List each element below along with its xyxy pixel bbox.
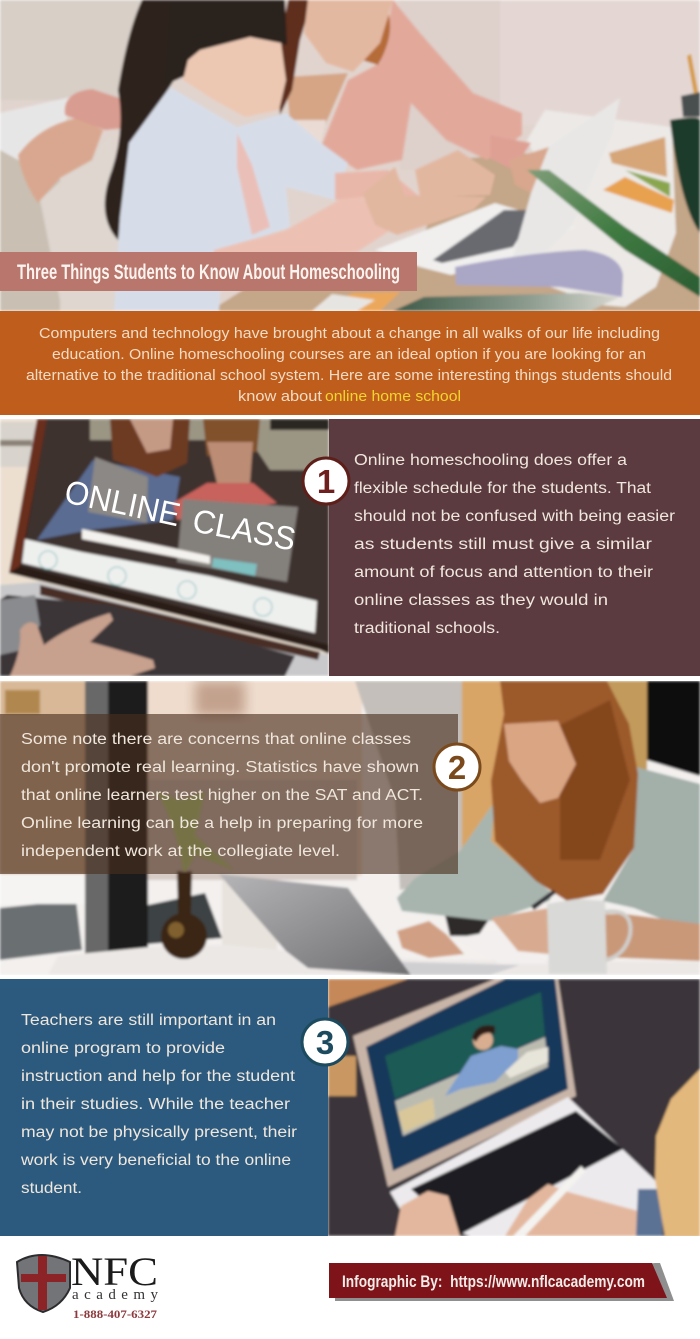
plant leaves xyxy=(527,170,700,297)
text block 3: Teachers are still important in an xyxy=(21,1012,276,1029)
curtain xyxy=(355,681,468,890)
laptop lid xyxy=(516,100,620,238)
arm xyxy=(549,914,700,961)
text block 2: independent work at the collegiate level. xyxy=(21,843,340,860)
text block 1: flexible schedule for the students. That xyxy=(354,480,652,497)
pencil cup xyxy=(681,92,700,117)
keyboard deck xyxy=(0,582,329,676)
wood wall xyxy=(462,681,522,871)
text block 2: don't promote real learning. Statistics have shown xyxy=(21,759,419,776)
text block 1: online classes as they would in xyxy=(354,592,608,609)
hero photo: girl and mother at laptop xyxy=(0,0,700,311)
blurred street background xyxy=(147,681,362,876)
laptop screen xyxy=(366,979,568,1171)
number badge 2 xyxy=(434,744,480,790)
logo: 1-888-407-6327 xyxy=(73,1309,157,1321)
credit banner xyxy=(329,1263,674,1301)
text block 1: traditional schools. xyxy=(354,620,500,637)
plant in vase xyxy=(157,792,234,872)
hinge xyxy=(40,585,320,660)
text block 3: may not be physically present, their xyxy=(21,1124,297,1141)
laptop lid xyxy=(353,979,576,1187)
pen xyxy=(531,890,556,910)
panel 3 xyxy=(0,979,328,1236)
intro text: online home school xyxy=(325,389,461,405)
woman face xyxy=(304,0,393,72)
girl sleeve xyxy=(213,196,388,252)
laptop screen caption: ONLINE xyxy=(62,473,184,533)
face xyxy=(504,721,576,803)
stickies xyxy=(347,291,400,311)
sweater right xyxy=(603,764,700,924)
woman neck xyxy=(286,73,348,123)
text block 2: that online learners test higher on the SAT and ACT. xyxy=(21,787,423,804)
button xyxy=(212,558,257,576)
right white desk xyxy=(527,110,676,307)
sleeve xyxy=(636,1189,663,1236)
notebook xyxy=(455,931,549,964)
grey window frame xyxy=(85,681,109,966)
number badge 2: 2 xyxy=(448,749,466,786)
sweater left xyxy=(397,801,553,921)
screen picture xyxy=(21,419,329,645)
intro text: know about xyxy=(238,389,322,405)
hands xyxy=(395,1191,460,1236)
logo: NFC xyxy=(71,1249,158,1294)
left car xyxy=(0,900,82,960)
ponytail xyxy=(103,0,174,240)
text block 3: online program to provide xyxy=(21,1040,225,1057)
logo: academy xyxy=(72,1287,158,1303)
text block 1: should not be confused with being easier xyxy=(354,508,675,525)
classroom desk xyxy=(395,1037,548,1136)
teacher xyxy=(445,1046,518,1096)
intro text: education. Online homeschooling courses are an ideal option if you are looking for an xyxy=(52,347,646,363)
glass xyxy=(222,880,277,965)
search box xyxy=(82,529,210,564)
logo xyxy=(17,1249,158,1321)
icon: shield xyxy=(17,1255,70,1312)
right hand xyxy=(491,908,549,954)
woman's far arm and hand xyxy=(18,118,103,203)
number badge 1: 1 xyxy=(317,463,335,500)
laptop screen caption: CLASS xyxy=(190,502,299,558)
table wood xyxy=(210,140,700,311)
text block 1 xyxy=(354,452,675,637)
keyboard keys xyxy=(0,595,295,676)
shadow under sweater xyxy=(445,915,492,936)
table xyxy=(48,945,700,975)
laptop screen caption xyxy=(62,473,299,558)
keyboard xyxy=(411,1111,623,1234)
intro text: alternative to the traditional school system. Here are some interesting things students should xyxy=(26,368,672,384)
title bar xyxy=(0,252,417,291)
tablets xyxy=(88,457,148,523)
panel 1 xyxy=(329,419,700,676)
text block 2 xyxy=(21,731,423,860)
woman blouse xyxy=(321,0,522,170)
text block 3: work is very beneficial to the online xyxy=(20,1152,291,1169)
pink undershirt xyxy=(237,133,270,235)
woman on screen xyxy=(37,460,180,540)
intro text: Computers and technology have brought about a change in all walks of our life including xyxy=(39,326,660,342)
text block 3: student. xyxy=(21,1180,82,1197)
girl hair top xyxy=(165,0,287,85)
left desk xyxy=(0,97,70,161)
vase xyxy=(161,871,207,959)
laptop base xyxy=(390,1097,660,1236)
number badge 3: 3 xyxy=(316,1024,334,1061)
hand xyxy=(10,613,155,676)
text block 2: Online learning can be a help in preparing for more xyxy=(21,815,423,832)
intro band xyxy=(0,311,700,415)
screen bezel xyxy=(9,419,329,654)
photo: woman writing at laptop xyxy=(0,681,700,975)
left hand xyxy=(397,921,464,958)
girl shirt xyxy=(114,87,348,311)
chalkboard xyxy=(385,992,545,1099)
laptop base xyxy=(376,202,518,276)
panel 2: translucent xyxy=(0,714,458,874)
menu strip xyxy=(22,539,317,633)
right car xyxy=(148,893,222,944)
text block 1: Online homeschooling does offer a xyxy=(354,452,627,469)
laptop lid xyxy=(219,874,411,975)
woman hair xyxy=(279,0,312,115)
boy on screen xyxy=(173,483,277,520)
dark pillar xyxy=(108,681,148,966)
heading: Three Things Students to Know About Homeschooling xyxy=(17,261,400,284)
chair xyxy=(40,182,60,296)
hair xyxy=(655,1069,700,1237)
intro text xyxy=(26,326,672,405)
text block 3 xyxy=(20,1012,297,1197)
laptop keyboard xyxy=(433,210,527,263)
text block 3: in their studies. While the teacher xyxy=(21,1096,290,1113)
text block 1: as students still must give a similar xyxy=(354,536,652,553)
number badge 1 xyxy=(303,458,349,504)
text block 3: instruction and help for the student xyxy=(21,1068,296,1085)
pencil pouch xyxy=(455,250,623,297)
photo: laptop showing online class xyxy=(0,419,329,676)
girl hands xyxy=(415,150,495,197)
number badge 3 xyxy=(302,1019,348,1065)
photo: laptop with teacher on screen xyxy=(328,979,700,1237)
woman cuff and hand xyxy=(491,138,532,168)
girl face xyxy=(183,37,286,117)
books xyxy=(609,137,667,177)
mug xyxy=(547,899,607,974)
text block 2: Some note there are concerns that online classes xyxy=(21,731,411,748)
pen xyxy=(513,1166,586,1236)
text block 1: amount of focus and attention to their xyxy=(354,564,653,581)
hair xyxy=(491,681,638,901)
